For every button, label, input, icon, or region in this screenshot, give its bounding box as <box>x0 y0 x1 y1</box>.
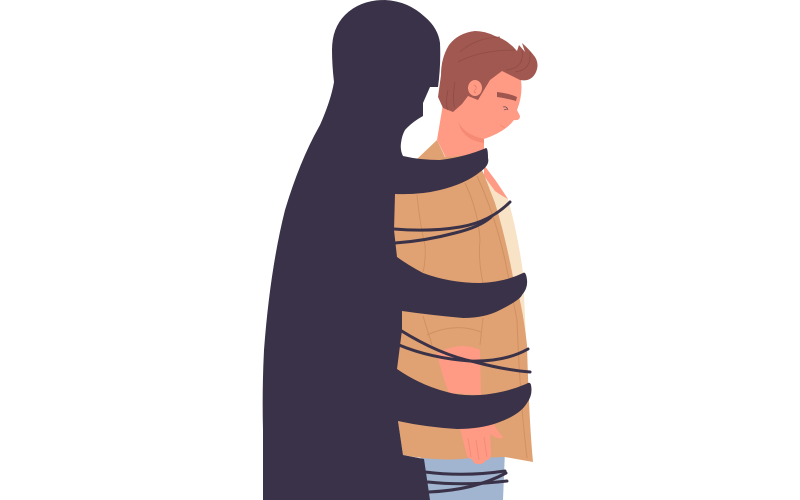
jacket seams <box>417 176 527 458</box>
hand <box>460 423 503 464</box>
man figure <box>394 31 538 500</box>
jaw shadow <box>458 121 484 143</box>
rope around waist <box>399 330 530 372</box>
face <box>445 70 522 150</box>
neck and chest skin <box>437 104 508 199</box>
forearm skin <box>437 346 481 395</box>
cream shirt <box>486 172 526 400</box>
shadow figure <box>263 0 532 500</box>
ear <box>468 80 482 96</box>
rope around chest <box>394 202 510 243</box>
jeans <box>420 450 505 500</box>
eyebrow <box>497 92 517 101</box>
closed eye <box>503 107 508 110</box>
hair <box>438 31 538 112</box>
mouth <box>500 125 505 128</box>
rope around legs <box>425 471 507 492</box>
jacket <box>394 140 533 462</box>
